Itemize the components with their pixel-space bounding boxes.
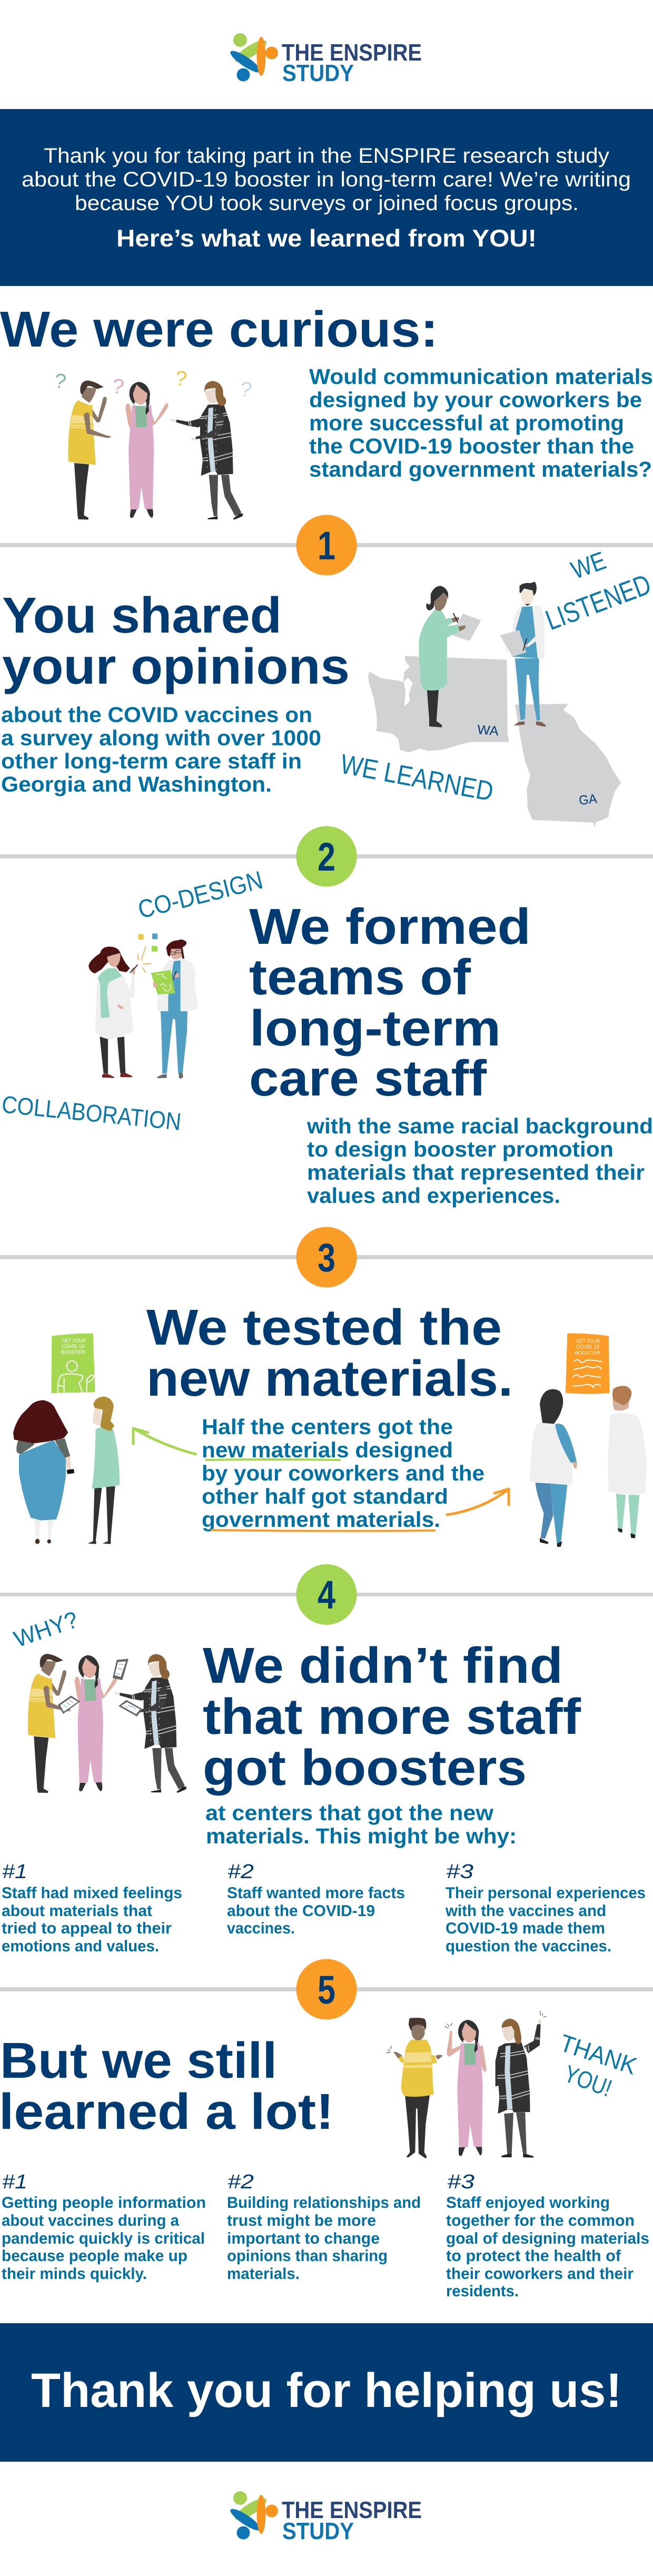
icon: enspire people mark [228,33,278,81]
poster: co-designed: BOOSTER! [61,1349,86,1355]
body text: other half got standard [202,1484,448,1508]
handwritten: why: WHY? [11,1606,81,1652]
reason 2 [227,1861,405,1937]
lesson 3: together for the common [446,2212,635,2229]
heading: We were curious: [0,301,438,358]
lesson 1: about vaccines during a [2,2212,179,2229]
heading: We didn’t find [203,1637,563,1694]
reason 1: Staff had mixed feelings [2,1884,182,1902]
logo wordmark [282,2496,422,2544]
figure: woman with scarf [88,946,138,1078]
step marker 4: 4 [318,1573,335,1617]
lesson 3: to protect the health of [446,2247,621,2265]
icon: tablets [58,1659,143,1716]
heading: long-term [250,1000,501,1057]
panel: intro banner [0,109,653,286]
heading: We tested the [146,1299,502,1356]
panel: you shared your opinions [1,547,653,828]
handwritten: we listened: WE [568,547,610,585]
handwritten: thank you [557,2029,640,2102]
figure: woman with long hair [13,1400,74,1544]
reason 3: with the vaccines and [445,1902,606,1920]
underline: new materials [206,1459,340,1460]
body text: materials that represented their [307,1160,645,1185]
lesson 2: trust might be more [227,2212,376,2229]
logo: top [228,33,422,86]
heading [146,1299,513,1407]
illustration: three staff with question marks: ? [174,366,189,391]
poster: standard [566,1334,609,1394]
heading: care staff [249,1050,487,1107]
panel: but we still learned a lot [0,2011,649,2300]
illustration: three staff waving [386,2011,547,2158]
lesson 2: materials. [227,2265,300,2283]
illustration: three staff with tablets [28,1654,186,1793]
label: GA: GA [578,792,598,808]
reason 1 [2,1861,182,1955]
heading: learned a lot! [0,2084,334,2140]
heading: that more staff [203,1689,581,1745]
step marker 1 [0,515,653,575]
reason 3: COVID-19 made them [446,1920,605,1937]
step marker 5: 5 [318,1968,335,2012]
panel: we were curious [0,301,653,520]
heading: new materials. [146,1350,513,1407]
reason 1: emotions and values. [2,1938,159,1955]
body text [202,1415,484,1532]
question text: standard government materials? [309,457,652,481]
heading [249,899,531,1107]
step marker 3 [0,1227,653,1287]
lesson 3: Staff enjoyed working [446,2194,610,2212]
step marker 2: 2 [318,835,335,880]
heading [203,1637,581,1796]
lesson 3 [446,2171,649,2300]
question text: the COVID-19 booster than the [309,434,634,458]
illustration: three staff with question marks [53,366,253,520]
arrow: green to left staff [133,1428,196,1454]
lesson 2 [227,2171,421,2283]
question text [309,364,653,481]
body text [1,703,321,796]
heading: got boosters [203,1740,527,1796]
reason 3: #3 [446,1861,473,1883]
reason 2: vaccines. [227,1920,295,1937]
figure: woman with green clipboard [151,940,199,1079]
handwritten: we learned: WE LEARNED [338,749,496,807]
poster: co-designed [51,1334,95,1393]
logo wordmark: STUDY [282,2518,354,2544]
illustration: three staff with question marks: ? [111,374,125,399]
heading: We formed [249,899,531,955]
step marker 2 [0,826,653,887]
figure: man with clipboard [500,581,546,727]
map: Washington [368,656,509,753]
body text: at centers that got the new [205,1801,493,1825]
illustration: staff viewing green poster [13,1334,120,1544]
reason 1: about materials that [2,1902,152,1920]
heading: You shared [2,587,282,644]
lesson 2: #2 [227,2171,254,2193]
poster: co-designed: COVID 19 [62,1344,84,1349]
reason 2: Staff wanted more facts [227,1884,405,1902]
reason 2: about the COVID-19 [227,1902,375,1920]
figure: woman in pink [444,2020,487,2156]
poster: co-designed: GET YOUR [62,1338,86,1344]
lesson 2: Building relationships and [227,2194,421,2212]
intro bold line: Here’s what we learned from YOU! [116,224,537,252]
lesson 2: opinions than sharing [227,2247,388,2265]
icons: idea squares and sparks [138,933,157,973]
arrow: orange to right staff [447,1489,509,1515]
logo wordmark: STUDY [282,60,354,86]
illustration: three staff with question marks: ? [239,377,253,402]
body text: materials. This might be why: [206,1824,517,1848]
step marker 3: 3 [318,1236,335,1280]
illustration: staff viewing orange poster [530,1334,647,1547]
poster: standard: BOOSTER! [575,1350,600,1356]
question text: Would communication materials [309,364,653,389]
body text: by your coworkers and the [202,1461,484,1485]
body text [205,1801,517,1848]
lesson 1: #1 [2,2171,27,2193]
question text: designed by your coworkers be [309,388,642,412]
panel: we tested the new materials [13,1299,647,1547]
body text: new materials designed [202,1438,453,1462]
handwritten: thank you: THANK [557,2029,640,2080]
lesson 1: Getting people information [2,2194,206,2212]
panel: thank you banner [0,2323,653,2462]
intro text: Thank you for taking part in the ENSPIRE research study [44,144,609,167]
heading: But we still [0,2032,277,2089]
lesson 3: #3 [447,2171,474,2193]
heading [2,587,350,695]
logo wordmark [282,39,422,86]
thank you text: Thank you for helping us! [31,2364,622,2417]
handwritten: thank you: YOU! [561,2060,616,2102]
body text: about the COVID vaccines on [1,703,312,727]
intro text: about the COVID-19 booster in long-term care! We’re writing [22,168,631,191]
step marker 1: 1 [318,524,335,568]
lesson 1: their minds quickly. [2,2265,147,2283]
reason 3: Their personal experiences [446,1884,646,1902]
lesson 3: goal of designing materials [446,2230,649,2247]
underline: government materials [212,1530,434,1531]
body text [306,1114,653,1208]
heading: teams of [249,949,471,1005]
panel: we didn't find [2,1606,646,1955]
lesson 3: residents. [446,2283,519,2300]
body text: Half the centers got the [202,1415,453,1439]
step marker 5 [0,1959,653,2019]
handwritten: collaboration: COLLABORATION [1,1090,182,1136]
body text: government materials. [202,1507,440,1532]
body text: with the same racial background [306,1114,653,1138]
lesson 2: important to change [227,2230,380,2247]
intro text [22,144,631,215]
icon: enspire people mark [228,2491,278,2540]
illustration: two co-designers [88,933,199,1079]
reason 2: #2 [227,1861,254,1883]
step marker 4 [0,1564,653,1625]
logo wordmark: THE ENSPIRE [282,39,422,66]
logo wordmark: THE ENSPIRE [282,2496,422,2523]
illustration: three staff with question marks: ? [53,369,67,393]
figure: woman in dark coat [496,2011,547,2158]
heading [0,2032,334,2140]
poster: standard: GET YOUR [576,1338,600,1344]
reason 3: question the vaccines. [446,1938,611,1955]
logo: bottom [228,2491,422,2544]
figure: person in white coat with dark hair [530,1389,577,1547]
body text: a survey along with over 1000 [1,726,321,750]
label: WA: WA [477,722,499,738]
body text: values and experiences. [307,1183,560,1208]
body text: other long-term care staff in [1,749,302,773]
map: Georgia [515,704,621,828]
lesson 3: their coworkers and their [446,2265,634,2283]
body text: Georgia and Washington. [1,772,272,796]
body text: to design booster promotion [307,1137,614,1161]
intro text: because YOU took surveys or joined focus groups. [75,192,579,215]
figure: man in yellow sweater [386,2018,443,2158]
question text: more successful at promoting [309,411,624,435]
heading: your opinions [2,638,350,695]
handwritten: co-design: CO-DESIGN [135,866,265,924]
lesson 1: because people make up [2,2247,187,2265]
panel: we formed teams [1,866,653,1208]
illustration: maps and staff [368,581,621,828]
lesson 1: pandemic quickly is critical [2,2230,205,2247]
lesson 1 [2,2171,206,2283]
reason 1: tried to appeal to their [2,1920,172,1937]
reason 3 [445,1861,646,1955]
reason 1: #1 [2,1861,27,1883]
figure: woman in teal [88,1397,120,1544]
figure: woman with paper [419,586,481,727]
poster: standard: COVID 19 [576,1344,599,1350]
figure: person in white coat with brown hair [608,1386,647,1538]
